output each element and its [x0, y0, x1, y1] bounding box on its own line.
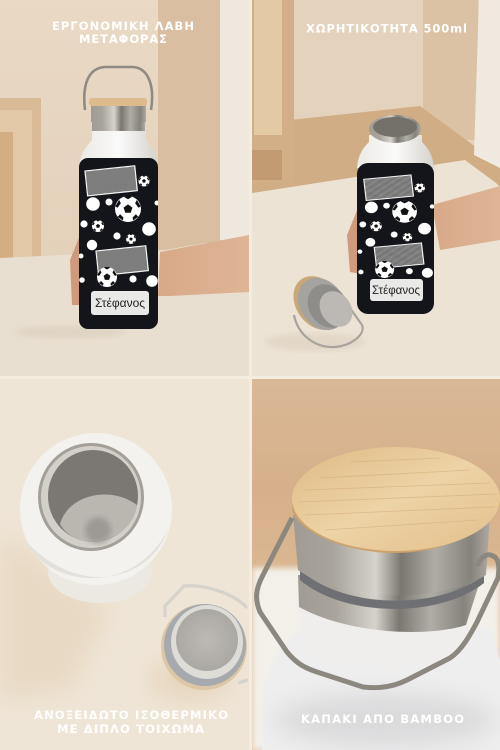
lower white area — [252, 568, 500, 750]
football print — [78, 166, 160, 287]
table — [0, 243, 249, 376]
background — [252, 379, 500, 750]
caption: ergonomic handle — [53, 22, 193, 43]
caption: ergonomic handle: ΕΡΓΟΝΟΜΙΚΗ ΛΑΒΗ — [52, 19, 194, 33]
shoulder — [20, 433, 172, 585]
curtain — [474, 0, 500, 168]
caption: stainless: ΑΝΟΞΕΙΔΩΤΟ ΙΣΟΘΕΡΜΙΚΟ — [34, 708, 228, 722]
rim highlight — [41, 446, 141, 548]
bottle top view — [20, 433, 172, 603]
wall background — [0, 0, 222, 256]
bamboo top — [292, 447, 500, 551]
handle — [165, 586, 248, 683]
steel disc — [176, 609, 238, 671]
handle — [84, 67, 152, 110]
panel: ergonomic carrying handle — [0, 0, 250, 376]
cap shadow — [268, 334, 362, 350]
black body — [357, 163, 434, 314]
caption: ergonomic handle: ΜΕΤΑΦΟΡΑΣ — [79, 32, 167, 46]
caption: bamboo: ΚΑΠΑΚΙ ΑΠΟ BAMBOO — [301, 712, 464, 726]
floor — [252, 106, 500, 195]
inner dimple — [85, 517, 111, 543]
rubber gasket — [300, 570, 484, 609]
curtain — [220, 0, 250, 240]
arm and hand — [70, 235, 249, 305]
name label — [91, 291, 149, 315]
white shoulder — [80, 128, 157, 162]
inner bottom — [60, 495, 137, 542]
name label: Στέφανος — [372, 285, 420, 297]
inner wall — [48, 450, 138, 542]
right wall section — [158, 0, 220, 260]
open steel rim — [369, 115, 421, 143]
wooden cabinet — [0, 98, 41, 258]
steel neck — [92, 122, 145, 131]
table — [252, 160, 500, 376]
removed cap with handle — [293, 276, 364, 348]
handle — [294, 308, 363, 347]
football print — [358, 175, 435, 278]
cap body — [298, 278, 340, 330]
cap edge — [294, 276, 325, 330]
white neck — [298, 600, 470, 669]
name label — [370, 279, 423, 301]
bamboo side — [292, 495, 500, 553]
cap disc — [320, 291, 352, 327]
steel band — [293, 515, 490, 595]
bottle shoulder — [262, 628, 500, 750]
wall — [294, 0, 479, 146]
bamboo edge — [161, 604, 247, 690]
surface background — [0, 379, 249, 750]
steel disc rim — [171, 605, 243, 679]
lower body — [48, 541, 152, 603]
shoulder grey reflection — [275, 694, 495, 746]
caption: stainless: ΜΕ ΔΙΠΛΟ ΤΟΙΧΩΜΑ — [57, 722, 204, 736]
caption: stainless — [34, 708, 228, 736]
shoulder shadow — [25, 530, 168, 578]
bottle — [78, 67, 160, 329]
cap top view — [161, 586, 248, 690]
cap thread — [308, 284, 344, 328]
bottle shadow — [22, 326, 118, 338]
steel neck — [298, 575, 482, 632]
panel: stainless insulated double wall — [0, 379, 249, 750]
black body — [79, 158, 158, 329]
panel: bamboo lid — [252, 379, 500, 750]
name label: Στέφανος — [95, 296, 145, 310]
gasket — [164, 604, 246, 686]
bottle — [357, 115, 435, 314]
bamboo lid — [89, 98, 147, 106]
panel: capacity 500ml — [252, 0, 500, 376]
white shoulder — [357, 135, 434, 168]
wood grain — [298, 458, 497, 530]
arm and hand — [347, 186, 500, 274]
metal handle — [257, 518, 499, 688]
steel rim — [38, 443, 144, 551]
soft shadow — [0, 530, 110, 700]
cap shadow — [150, 660, 230, 700]
wooden cabinet — [252, 0, 294, 183]
caption: capacity: ΧΩΡΗΤΙΚΟΤΗΤΑ 500ml — [306, 22, 467, 36]
side wall — [423, 0, 478, 140]
steel cap — [91, 105, 146, 122]
